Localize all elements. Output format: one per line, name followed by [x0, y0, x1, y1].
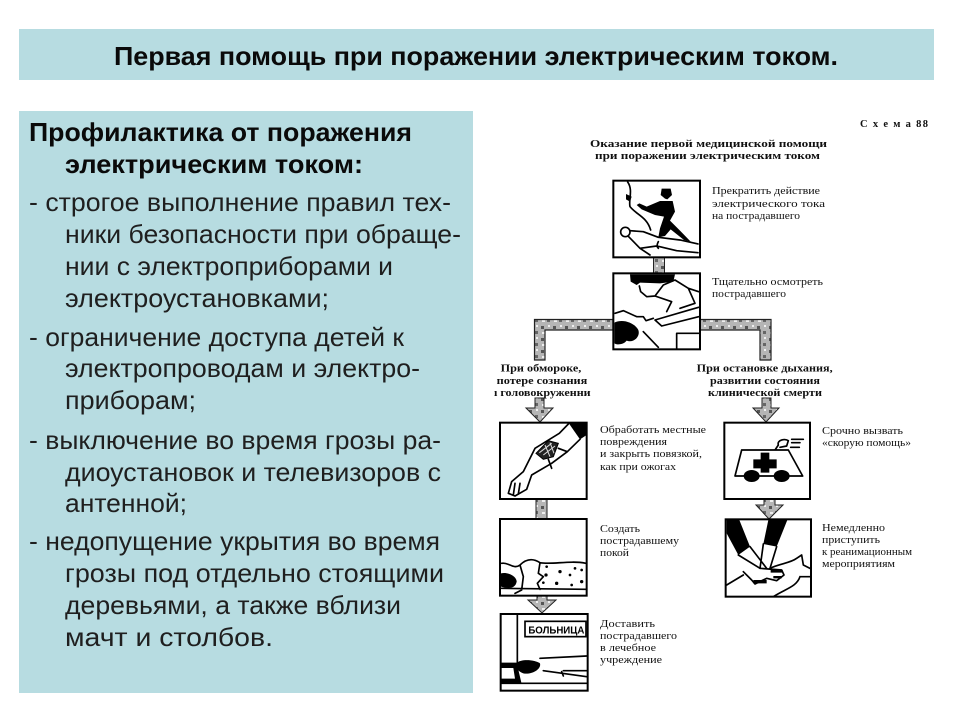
caption: resuscitate: Немедленно	[822, 523, 885, 534]
label: fainting: потере сознания	[497, 376, 588, 387]
caption: resuscitate: к реанимационным	[822, 547, 912, 558]
caption: call ambulance: «скорую помощь»	[822, 438, 911, 449]
text block: safety rules: - строгое выполнение правил тех-	[29, 187, 451, 217]
icon: examining victim	[613, 273, 700, 349]
icon: bandaged arm	[500, 423, 587, 499]
caption: treat injuries: как при ожогах	[600, 462, 677, 473]
caption: stop current	[712, 186, 825, 222]
text block: thunderstorm appliances: антенной;	[65, 488, 187, 518]
icon: hospital stretcher: БОЛЬНИЦА	[528, 625, 585, 636]
icon: ambulance	[724, 423, 810, 499]
label: fainting: ı головокруженни	[494, 388, 591, 399]
connectors and arrows	[526, 257, 783, 613]
text block: child access: - ограничение доступа детей к	[29, 322, 405, 352]
text block: safety rules: нии с электроприборами и	[65, 251, 393, 281]
scheme heading	[590, 139, 827, 162]
caption: deliver to hospital: учреждение	[600, 655, 662, 666]
caption: rest: покой	[600, 548, 629, 559]
heading: prevention	[29, 117, 412, 179]
caption: deliver to hospital: Доставить	[600, 619, 655, 630]
heading: prevention: электрическим током:	[65, 149, 363, 179]
caption: deliver to hospital	[600, 619, 677, 666]
scheme heading: Оказание первой медицинской помощи	[590, 139, 827, 150]
caption: examine	[712, 277, 823, 300]
icon: rescuer pulls wire	[613, 181, 700, 257]
caption: resuscitate: мероприятиям	[822, 559, 895, 570]
caption: call ambulance: Срочно вызвать	[822, 426, 903, 437]
caption: resuscitate	[822, 523, 912, 570]
text block: shelter: мачт и столбов.	[65, 622, 273, 652]
caption: treat injuries: и закрыть повязкой,	[600, 449, 702, 460]
text block: thunderstorm appliances: диоустановок и телевизоров с	[65, 457, 441, 487]
title band	[19, 29, 934, 80]
text block: child access: приборам;	[65, 385, 196, 415]
scheme label: С х е м а 88	[860, 119, 928, 130]
text block: safety rules	[29, 187, 461, 313]
caption: rest: пострадавшему	[600, 536, 680, 547]
text block: shelter: деревьями, а также вблизи	[65, 590, 401, 620]
caption: stop current: электрического тока	[712, 199, 825, 210]
text block: safety rules: электроустановками;	[65, 283, 329, 313]
scheme heading: при поражении электрическим током	[595, 151, 820, 162]
heading: prevention: Профилактика от поражения	[29, 117, 412, 147]
caption: stop current: на пострадавшего	[712, 211, 800, 222]
panel: prevention	[19, 111, 473, 693]
label: respiratory arrest: развитии состояния	[710, 376, 821, 387]
label: respiratory arrest: При остановке дыхания,	[697, 364, 833, 375]
text block: thunderstorm appliances	[29, 425, 441, 518]
caption: stop current: Прекратить действие	[712, 186, 820, 197]
icons lower	[500, 423, 811, 691]
text block: safety rules: ники безопасности при обраще-	[65, 219, 461, 249]
caption: resuscitate: приступить	[822, 535, 880, 546]
icon: cardiac resuscitation	[726, 519, 811, 597]
label: respiratory arrest	[697, 364, 833, 399]
caption: rest	[600, 524, 680, 559]
icon: resting under blanket	[500, 519, 587, 596]
text block: thunderstorm appliances: - выключение во время грозы ра-	[29, 425, 441, 455]
caption: treat injuries: Обработать местные	[600, 425, 706, 436]
text block: shelter: грозы под отдельно стоящими	[65, 558, 444, 588]
icon: hospital stretcher	[501, 614, 588, 691]
caption: deliver to hospital: пострадавшего	[600, 631, 677, 642]
caption: examine: Тщательно осмотреть	[712, 277, 823, 288]
icons upper	[494, 181, 833, 399]
text block: shelter: - недопущение укрытия во время	[29, 526, 440, 556]
caption: rest: Создать	[600, 524, 640, 535]
caption: deliver to hospital: в лечебное	[600, 643, 656, 654]
caption: treat injuries	[600, 425, 706, 473]
caption: treat injuries: повреждения	[600, 437, 667, 448]
label: fainting	[494, 364, 591, 399]
text block: shelter	[29, 526, 444, 652]
label: respiratory arrest: клинической смерти	[708, 388, 822, 399]
title: Первая помощь при поражении электрическим током.	[114, 41, 838, 71]
text block: child access	[29, 322, 420, 415]
caption: call ambulance	[822, 426, 911, 449]
text block: child access: электропроводам и электро-	[65, 353, 420, 383]
label: fainting: При обмороке,	[501, 364, 582, 375]
caption: examine: пострадавшего	[712, 289, 786, 300]
